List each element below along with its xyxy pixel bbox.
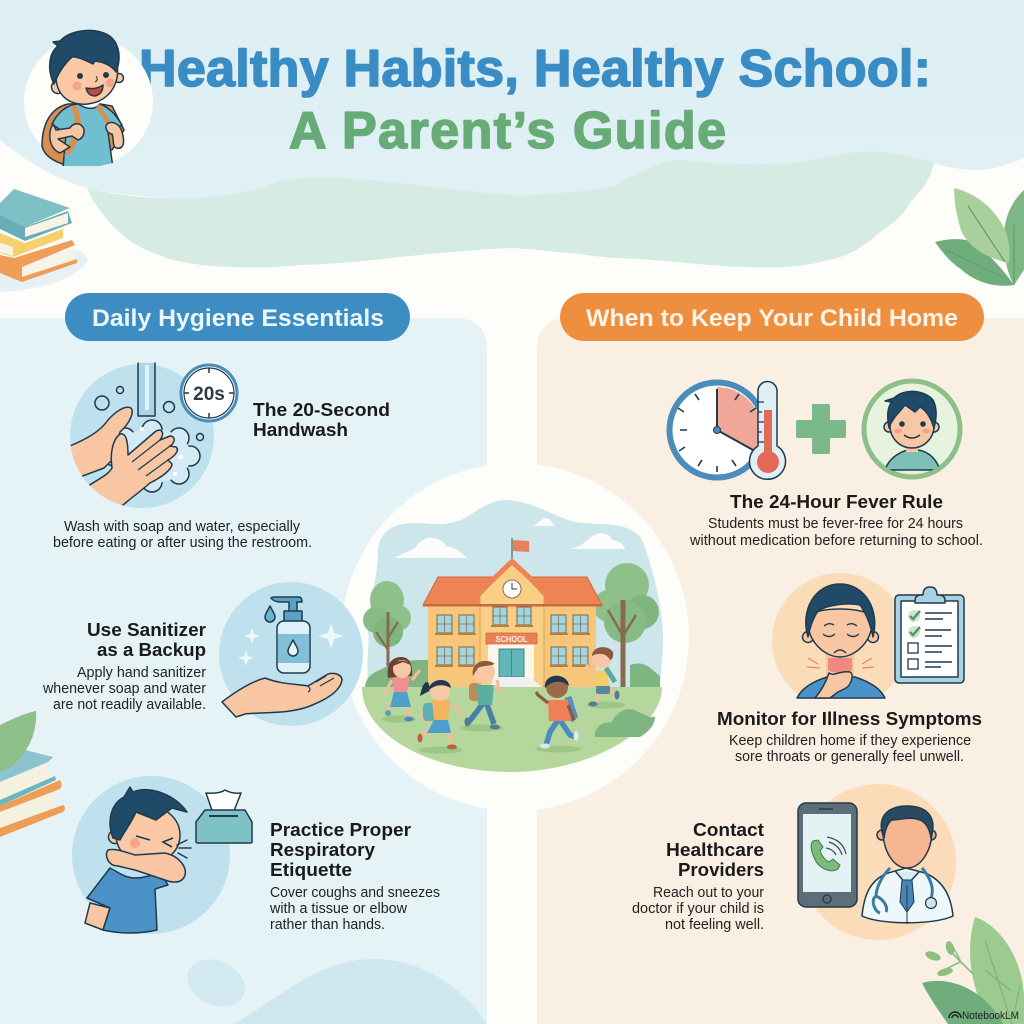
icon: doctor with stethoscope [862,806,953,924]
title [139,40,931,160]
trees [363,563,660,687]
watermark: NotebookLM: NotebookLM [962,1010,1019,1022]
title line 1: Healthy Habits, Healthy School: [139,40,931,98]
heading: the 20-second handwash: The 20-Second [253,399,390,420]
kid: boy with yellow shirt [586,647,625,708]
text: respiratory description: with a tissue or elbow [269,901,408,917]
icon: child coughing into elbow [72,776,230,934]
text: contact description: doctor if your child is [632,901,764,917]
icon: symptom checklist clipboard [895,587,964,683]
icon: child with sore throat [772,573,895,699]
heading: contact healthcare providers: Healthcare [666,839,764,860]
heading: contact healthcare providers: Providers [678,859,764,880]
item: monitor for illness symptoms [717,573,982,765]
panel: daily hygiene background [0,318,487,1024]
icon: phone with call [798,803,857,907]
icon: thermometer [750,382,786,479]
text: contact description: Reach out to your [653,885,764,901]
text: handwash description [53,519,312,551]
item: respiratory etiquette [72,776,440,934]
item: use sanitizer [42,582,363,726]
text: sanitizer description: Apply hand sanitizer [77,665,206,681]
background: header blue wave [0,0,1024,210]
icon: books top left [0,189,88,292]
bush [595,709,655,737]
heading pill: when to keep your child home: When to Keep Your Child Home [586,305,958,332]
title line 2: A Parent’s Guide [289,102,726,160]
white centre disc behind school [341,463,689,811]
item: 24-hour fever rule [670,381,983,549]
icon: recovered child in circle [864,381,960,477]
heading: practice proper respiratory etiquette [270,819,411,880]
heading: monitor for illness symptoms: Monitor for Illness Symptoms [717,708,982,729]
text: fever rule description: Students must be fever-free for 24 hours [708,516,963,532]
icon: 20s timer: 20s [193,384,225,405]
text: contact description [632,885,764,933]
kid: boy with green shirt [461,661,503,732]
text: fever rule description [689,516,983,549]
kid: boy with orange shirt [535,676,581,752]
icon: leaves bottom right [922,917,1024,1024]
decorative blob: large [233,959,487,1024]
text: respiratory description: Cover coughs and sneezes [270,885,440,901]
icon: orange circle backdrop [800,784,956,940]
text: symptoms description [729,733,971,765]
text: sanitizer description: are not readily available. [53,697,206,713]
heading pill: daily hygiene essentials [65,293,410,341]
icon: hands washing [65,363,214,512]
heading: use sanitizer as a backup: as a Backup [97,639,206,660]
item: contact healthcare providers [632,784,956,940]
kid: girl in pink [382,657,420,722]
text: fever rule description: without medication before returning to school. [689,533,983,549]
text: handwash description: Wash with soap and water, especially [64,519,301,535]
icon: boy with backpack [24,30,153,168]
icon: books and leaf mid left [0,711,65,837]
heading: the 24-hour fever rule: The 24-Hour Fever Rule [730,491,943,512]
panel: keep child home background [537,318,1024,1024]
text: symptoms description: sore throats or generally feel unwell. [735,749,964,765]
kid: girl with blue skirt [418,680,463,754]
heading: use sanitizer as a backup: Use Sanitizer [87,619,206,640]
background: header green wave [87,152,934,268]
building: SCHOOL [496,634,528,644]
text: symptoms description: Keep children home if they experience [729,733,971,749]
sky [367,500,663,690]
heading: the 20-second handwash: Handwash [253,419,348,440]
heading: contact healthcare providers: Contact [693,819,764,840]
icon: 20s timer [181,365,237,421]
icon: sanitizer bottle and hand [219,582,363,726]
item: 20-second handwash [53,363,390,551]
decorative blob: small [180,950,252,1016]
heading: practice proper respiratory etiquette: Etiquette [270,859,352,880]
heading: contact healthcare providers [666,819,764,880]
heading pill: when to keep your child home [560,293,984,341]
icon: clock with fever wedge [670,382,764,478]
heading: the 20-second handwash [253,399,390,440]
heading pill: daily hygiene essentials: Daily Hygiene Essentials [92,305,384,332]
text: sanitizer description: whenever soap and water [42,681,206,697]
lawn [362,687,662,772]
text: respiratory description [269,885,440,933]
illustration: school scene [362,500,663,772]
icon: leaves top right [935,188,1024,286]
heading: practice proper respiratory etiquette: Practice Proper [270,819,411,840]
text: respiratory description: rather than hands. [270,917,385,933]
text: handwash description: before eating or after using the restroom. [53,535,312,551]
building [423,538,602,687]
heading: use sanitizer as a backup [87,619,206,660]
icon: green plus [796,404,846,454]
text: sanitizer description [42,665,206,713]
clouds [395,518,625,558]
text: contact description: not feeling well. [665,917,764,933]
icon: tissue box [196,790,252,843]
heading: practice proper respiratory etiquette: Respiratory [270,839,376,860]
